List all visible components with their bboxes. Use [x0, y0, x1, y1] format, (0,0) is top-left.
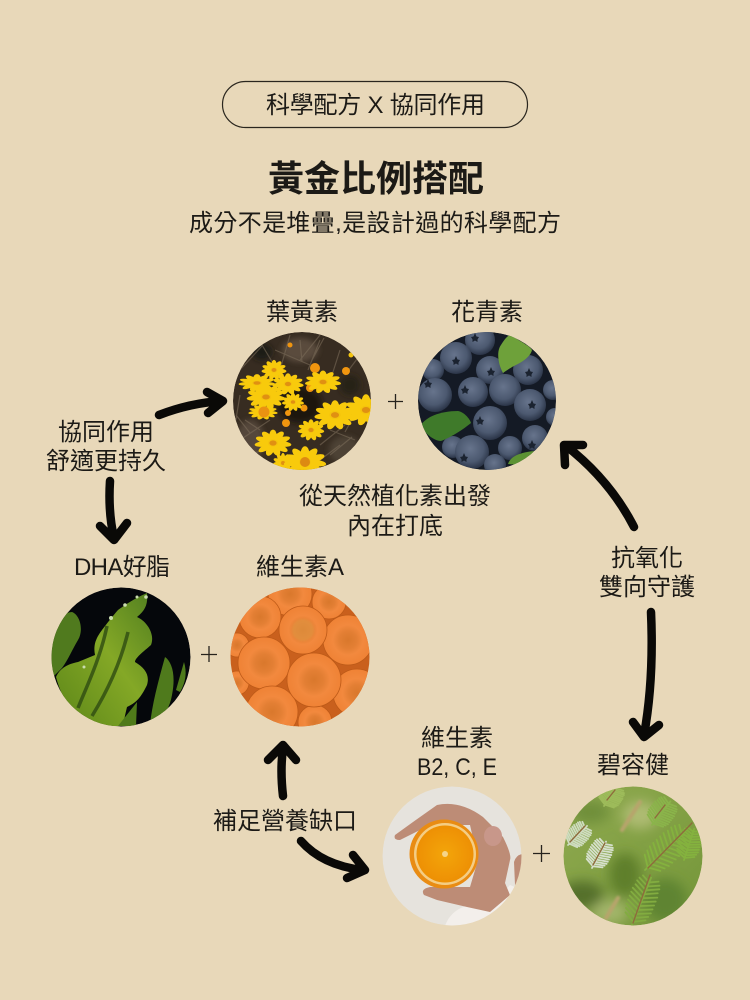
caption: antioxidant — [599, 545, 695, 601]
label: anthocyanin: 花青素 — [451, 299, 523, 326]
title: 黃金比例搭配 — [268, 158, 484, 199]
label: vitamins B2 C E — [417, 725, 497, 781]
photo: blueberries — [418, 332, 556, 470]
caption: start from botanical lutein: 從天然植化素出發 — [299, 483, 491, 510]
caption: fill nutrition gaps: 補足營養缺口 — [213, 808, 357, 835]
label: vitamins B2 C E: 維生素 — [421, 725, 493, 752]
caption: start from botanical lutein — [299, 483, 491, 540]
arrow: to lutein — [159, 392, 223, 415]
plus sign — [201, 646, 217, 662]
label: DHA: DHA好脂 — [74, 554, 170, 581]
badge: scientific formula: 科學配方 X 協同作用 — [266, 92, 485, 119]
photo: green leaf — [50, 588, 190, 730]
green leaves — [421, 335, 534, 464]
plus sign — [388, 394, 403, 409]
caption: start from botanical lutein: 內在打底 — [347, 513, 443, 540]
label: lutein: 葉黃素 — [266, 299, 338, 326]
photo: yellow flowers — [233, 332, 371, 470]
photo: carrots — [230, 588, 370, 726]
caption: synergy comfort — [46, 419, 166, 475]
arrow: to pycnogenol — [633, 612, 659, 737]
arrow: to DHA — [100, 481, 127, 540]
photo: orange in hand — [382, 786, 522, 926]
caption: antioxidant: 抗氧化 — [611, 545, 683, 572]
photo: pine branches — [564, 786, 702, 926]
plus sign — [533, 845, 550, 862]
subtitle: 成分不是堆疊,是設計過的科學配方 — [189, 210, 561, 237]
arrow: to vitamin A — [268, 745, 296, 796]
caption: synergy comfort: 協同作用 — [58, 419, 154, 446]
arrow: to anthocyanin — [564, 445, 634, 527]
label: vitamins B2 C E: B2, C, E — [417, 754, 497, 781]
label: pycnogenol: 碧容健 — [597, 752, 669, 779]
badge: scientific formula — [222, 82, 528, 128]
label: vitamin A: 維生素A — [256, 554, 344, 581]
caption: antioxidant: 雙向守護 — [599, 574, 695, 601]
arrow: to vitamin B2 C E — [301, 841, 365, 878]
caption: synergy comfort: 舒適更持久 — [46, 448, 166, 475]
